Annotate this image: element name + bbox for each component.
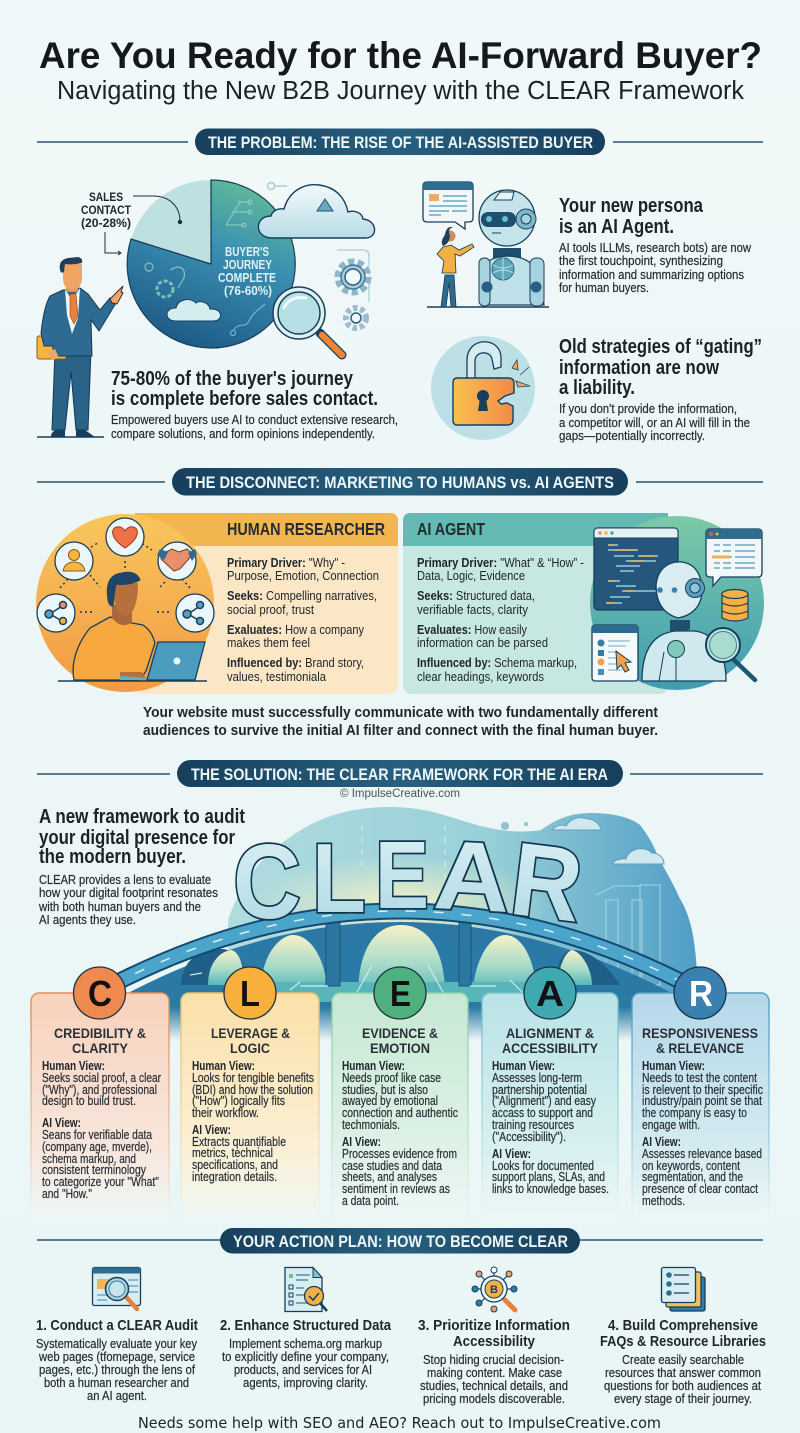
card text: connection and authentic	[342, 1106, 458, 1120]
card text	[342, 1059, 458, 1208]
card text: Assesses relevance based	[642, 1147, 762, 1161]
card: leverage and logic: LEVERAGE &	[211, 1025, 290, 1041]
icon: heart	[113, 527, 137, 548]
CLEAR wordmark	[233, 819, 588, 945]
card text: awayed by emotional	[342, 1094, 438, 1108]
text: human traits: values, testimoniala	[227, 669, 327, 684]
icon: data window	[706, 529, 762, 586]
badge: E: E	[390, 973, 411, 1014]
text: human traits	[227, 555, 379, 684]
card text: integration details.	[192, 1170, 277, 1184]
card text: segmentation, and the	[642, 1170, 743, 1184]
card text: on keywords, content	[642, 1159, 740, 1173]
text: journey stat: is complete before sales contact.	[111, 388, 378, 410]
text: AI traits: Evaluates: How easily	[417, 622, 527, 637]
section heading: the solution: THE SOLUTION: THE CLEAR FRAMEWORK FOR THE AI ERA	[191, 765, 608, 784]
CLEAR wordmark: A	[431, 819, 513, 933]
icon: document check	[285, 1268, 327, 1312]
section heading: the disconnect	[37, 468, 763, 496]
icon: magnifying glass	[273, 287, 342, 355]
card text: AI View:	[642, 1135, 681, 1149]
card text: AI View:	[192, 1123, 231, 1137]
step 3: information accessibility: studies, technical details, and	[420, 1379, 568, 1393]
section heading: the problem	[37, 128, 763, 155]
card: leverage and logic: LOGIC	[230, 1040, 270, 1056]
card text: AI View:	[492, 1147, 531, 1161]
step 3: information accessibility: Accessibility	[453, 1333, 536, 1350]
step 1: conduct audit: both a human researcher and	[44, 1376, 189, 1390]
card text: support plans, SLAs, and	[492, 1170, 605, 1184]
card: alignment and accessibility: ALIGNMENT &	[506, 1025, 594, 1041]
card text: Human View:	[492, 1059, 555, 1073]
card text: Human View:	[42, 1059, 105, 1073]
badge: A: A	[536, 973, 564, 1014]
card text: Extracts quantifiable	[192, 1135, 286, 1149]
card text	[642, 1059, 763, 1208]
card text: Seeks social proof, a clear	[42, 1071, 161, 1085]
card text: training resources	[492, 1118, 574, 1132]
CLEAR wordmark: L	[312, 823, 366, 933]
text: journey stat	[111, 368, 398, 441]
step 2: structured data: products, and services for AI	[234, 1363, 372, 1377]
card text: design to build trust.	[42, 1094, 136, 1108]
card: alignment and accessibility	[482, 967, 618, 1217]
card text	[192, 1059, 314, 1184]
CLEAR wordmark: E	[375, 822, 429, 929]
text: human traits: social proof, trust	[227, 602, 314, 617]
text: AI traits: Primary Driver: "What" & “How” -	[417, 555, 584, 570]
illustration: businessman	[37, 257, 123, 437]
title: Navigating the New B2B Journey with the CLEAR Framework	[57, 77, 744, 105]
card text: Looks for documented	[492, 1159, 594, 1173]
step 2: structured data: Implement schema.org markup	[229, 1337, 382, 1351]
section heading: action plan	[37, 1228, 763, 1254]
text: framework intro: CLEAR provides a lens to evaluate	[39, 873, 211, 887]
icon: network search: B	[490, 1284, 498, 1296]
section heading: action plan: YOUR ACTION PLAN: HOW TO BECOME CLEAR	[233, 1232, 568, 1251]
text: gating liability: If you don't provide the information,	[559, 402, 737, 416]
text: gating liability	[559, 336, 762, 443]
card text: ("How") logically fits	[192, 1094, 285, 1108]
CLEAR wordmark: R	[505, 821, 588, 945]
pie chart: buyer's journey: COMPLETE	[218, 271, 276, 285]
icon: share left	[45, 602, 66, 624]
text: AI traits: clear headings, keywords	[417, 669, 544, 684]
card: credibility and clarity	[31, 967, 169, 1217]
card: alignment and accessibility: ACCESSIBILITY	[502, 1040, 599, 1056]
text: human traits: Exaluates: How a company	[227, 622, 364, 637]
card text: a data point.	[342, 1194, 399, 1208]
icon: cloud	[258, 185, 375, 238]
card text: the company is easy to	[642, 1106, 747, 1120]
badge: L	[224, 967, 276, 1019]
badge: E	[374, 967, 426, 1019]
card text	[492, 1059, 609, 1196]
card text: sentiment in reviews as	[342, 1182, 450, 1196]
panel: human researcher: HUMAN RESEARCHER	[227, 519, 385, 539]
text: gating liability: a competitor will, or an AI will fill in the	[559, 416, 750, 430]
text: gating liability: Old strategies of “gating”	[559, 336, 762, 358]
icon: code window	[594, 528, 678, 610]
text: human traits: Influenced by: Brand story,	[227, 655, 364, 670]
card text: Human View:	[342, 1059, 405, 1073]
badge: R	[674, 967, 726, 1019]
callout: two audiences	[143, 704, 658, 739]
card text: specifications, and	[192, 1158, 278, 1172]
step 1: conduct audit: an AI agent.	[87, 1389, 147, 1403]
footer: Needs some help with SEO and AEO? Reach out to ImpulseCreative.com	[138, 1414, 661, 1432]
card text: their workflow.	[192, 1106, 259, 1120]
text: AI traits: Influenced by: Schema markup,	[417, 655, 577, 670]
section heading: the problem: THE PROBLEM: THE RISE OF THE AI-ASSISTED BUYER	[208, 133, 593, 152]
card text: presence of clear contact	[642, 1182, 758, 1196]
card text: Human View:	[642, 1059, 705, 1073]
text: journey stat: 75-80% of the buyer's journey	[111, 368, 354, 390]
pie chart: buyer's journey: BUYER'S	[225, 245, 269, 259]
step 2: structured data	[220, 1268, 392, 1390]
text: AI traits: Data, Logic, Evidence	[417, 568, 525, 583]
badge: L: L	[240, 973, 260, 1014]
label: sales contact	[81, 190, 182, 255]
text: framework intro: with both human buyers and the	[38, 900, 201, 914]
card text: ("Alignment") and easy	[492, 1094, 597, 1108]
text: framework intro: the modern buyer.	[39, 846, 186, 868]
text: journey stat: compare solutions, and form opinions independently.	[111, 427, 375, 441]
text: AI agent persona: information and summarizing options	[559, 268, 744, 282]
card text: Needs to test the content	[642, 1071, 757, 1085]
card text: industry/pain point se that	[642, 1094, 762, 1108]
step 4: FAQs and libraries: resources that answer common	[605, 1366, 761, 1380]
illustration: woman and robot	[423, 182, 549, 307]
text: human traits: makes them feel	[227, 635, 310, 650]
step 3: information accessibility	[418, 1267, 570, 1406]
card text: ("Why"), and professional	[42, 1083, 157, 1097]
card text	[42, 1059, 161, 1201]
callout: two audiences: audiences to survive the initial AI filter and connect with the final human buyer.	[143, 722, 658, 739]
text: AI agent persona: AI tools ILLMs, research bots) are now	[559, 241, 752, 255]
icon: share right	[183, 602, 204, 624]
icon: person	[63, 550, 85, 571]
text: human traits: Purpose, Emotion, Connection	[227, 568, 379, 583]
card text: techmonials.	[342, 1118, 400, 1132]
card: evidence and emotion: EVIDENCE &	[362, 1025, 438, 1041]
icon: open padlock	[431, 336, 535, 440]
step 1: conduct audit	[36, 1268, 198, 1403]
text: human traits: Primary Driver: "Why" -	[227, 555, 345, 570]
card text: Looks for tengible benefits	[192, 1071, 314, 1085]
card text: ("Accessibility").	[492, 1130, 566, 1144]
text: AI traits: information can be parsed	[417, 635, 548, 650]
panel: AI agent	[403, 513, 764, 694]
step 3: information accessibility: 3. Prioritize Information	[418, 1317, 570, 1334]
illustration: person with laptop	[36, 514, 214, 692]
step 4: FAQs and libraries: FAQs & Resource Libraries	[600, 1333, 766, 1350]
callout: two audiences: Your website must successfully communicate with two fundamentally different	[143, 704, 658, 721]
step 2: structured data: to explicitly define your company,	[222, 1350, 389, 1364]
step 4: FAQs and libraries: questions for both audiences at	[604, 1379, 761, 1393]
icon: audit window	[92, 1268, 140, 1309]
step 1: conduct audit: 1. Conduct a CLEAR Audit	[36, 1317, 198, 1334]
icon: gears	[337, 250, 369, 328]
card text: to categorize your "What"	[42, 1175, 159, 1189]
text: AI agent persona: Your new persona	[559, 195, 704, 217]
icon: database	[722, 590, 748, 621]
step 1: conduct audit: Systematically evaluate your key	[36, 1337, 198, 1351]
label: sales contact: SALES	[89, 190, 123, 204]
pie chart: buyer's journey: (76-60%)	[224, 284, 272, 298]
card text: sheets, and analyses	[342, 1170, 437, 1184]
card: evidence and emotion	[332, 967, 468, 1217]
pie chart: buyer's journey	[127, 180, 295, 348]
icon: magnifier	[706, 628, 755, 680]
step 4: FAQs and libraries: Create easily searchable	[622, 1353, 744, 1367]
step 3: information accessibility: pricing models discoverable.	[423, 1392, 565, 1406]
card text: accass to support and	[492, 1106, 593, 1120]
card text: studies, but is also	[342, 1083, 428, 1097]
icon: stacked pages	[662, 1268, 705, 1311]
icon: speech window	[423, 182, 473, 229]
text: gating liability: a liability.	[559, 377, 635, 399]
card text: partnership potential	[492, 1083, 587, 1097]
card: evidence and emotion: EMOTION	[370, 1040, 430, 1056]
label: sales contact: CONTACT	[81, 203, 132, 217]
text: framework intro: how your digital footprint resonates	[39, 886, 218, 900]
card text: consistent terminology	[42, 1163, 147, 1177]
card text: schema markup, and	[42, 1152, 136, 1166]
step 4: FAQs and libraries: 4. Build Comprehensive	[608, 1317, 758, 1334]
icon: cursor window	[592, 625, 638, 681]
icon: cloud in pie	[167, 300, 221, 321]
card text: metrics, technical	[192, 1146, 273, 1160]
step 4: FAQs and libraries	[600, 1268, 766, 1406]
card: credibility and clarity: CLARITY	[72, 1040, 129, 1056]
card text: (company age, mverde),	[42, 1140, 152, 1154]
text: AI traits: Seeks: Structured data,	[417, 588, 535, 603]
text: gating liability: information are now	[559, 357, 719, 379]
panel: AI agent: AI AGENT	[417, 519, 485, 539]
badge: C: C	[88, 973, 112, 1014]
card text: Seans for verifiable data	[42, 1128, 152, 1142]
card text: and "How."	[42, 1187, 92, 1201]
panel: human researcher	[36, 513, 398, 694]
text: AI traits	[417, 555, 584, 684]
step 2: structured data: agents, improving clarity.	[243, 1376, 368, 1390]
step 3: information accessibility: making content. Make case	[427, 1366, 562, 1380]
title	[39, 35, 762, 105]
card text: methods.	[642, 1194, 685, 1208]
card text: AI View:	[342, 1135, 381, 1149]
icon: sky clouds and skyline	[362, 818, 664, 990]
card text: is relevent to their specific	[642, 1083, 763, 1097]
text: framework intro: your digital presence for	[39, 827, 235, 849]
text: gating liability: gaps—potentially incorrectly.	[559, 429, 705, 443]
title: Are You Ready for the AI-Forward Buyer?	[39, 35, 762, 76]
card text: Assesses long-term	[492, 1071, 582, 1085]
pie chart: buyer's journey: JOURNEY	[223, 258, 273, 272]
text: journey stat: Empowered buyers use AI to conduct extensive research,	[111, 413, 398, 427]
label: sales contact: (20-28%)	[81, 216, 131, 230]
text: framework intro: A new framework to audit	[39, 806, 245, 828]
card text: case studies and data	[342, 1159, 442, 1173]
section heading: the disconnect: THE DISCONNECT: MARKETING TO HUMANS vs. AI AGENTS	[186, 473, 614, 492]
text: AI traits: verifiable facts, clarity	[417, 602, 528, 617]
section heading: the solution	[37, 760, 763, 787]
badge: R: R	[689, 973, 713, 1014]
card: responsiveness and relevance: RESPONSIVENESS	[642, 1025, 758, 1041]
card: responsiveness and relevance	[632, 967, 769, 1217]
badge: A	[524, 967, 576, 1019]
icon: network search	[472, 1267, 517, 1312]
text: AI agent persona: for human buyers.	[559, 281, 649, 295]
card text: AI View:	[42, 1116, 81, 1130]
copyright note: © ImpulseCreative.com	[340, 788, 460, 800]
step 1: conduct audit: pages, etc.) through the lens of	[39, 1363, 195, 1377]
card text: links to knowledge bases.	[492, 1182, 609, 1196]
step 2: structured data: 2. Enhance Structured Data	[220, 1317, 392, 1334]
illustration: CLEAR bridge	[110, 807, 698, 1040]
card: leverage and logic	[181, 967, 319, 1217]
card text: Processes evidence from	[342, 1147, 457, 1161]
card: responsiveness and relevance: & RELEVANCE	[656, 1040, 744, 1056]
text: framework intro	[38, 806, 245, 927]
card: credibility and clarity: CREDIBILITY &	[54, 1025, 146, 1041]
step 4: FAQs and libraries: every stage of their journey.	[614, 1392, 752, 1406]
text: AI agent persona	[559, 195, 752, 295]
text: framework intro: AI agents they use.	[39, 913, 136, 927]
card text: engage with.	[642, 1118, 700, 1132]
text: AI agent persona: the first touchpoint, synthesizing	[559, 254, 723, 268]
text: human traits: Seeks: Compelling narratives,	[227, 588, 377, 603]
text: AI agent persona: is an AI Agent.	[559, 216, 674, 238]
CLEAR wordmark: C	[233, 823, 301, 941]
step 1: conduct audit: web pages (tfomepage, service	[38, 1350, 195, 1364]
illustration: AI robot	[590, 516, 764, 690]
card text: (BDI) and how the solution	[192, 1083, 313, 1097]
card text: Needs proof like case	[342, 1071, 441, 1085]
card text: Human View:	[192, 1059, 255, 1073]
icon: handshake	[157, 549, 197, 571]
step 3: information accessibility: Stop hiding crucial decision-	[423, 1353, 564, 1367]
badge: C	[74, 967, 126, 1019]
